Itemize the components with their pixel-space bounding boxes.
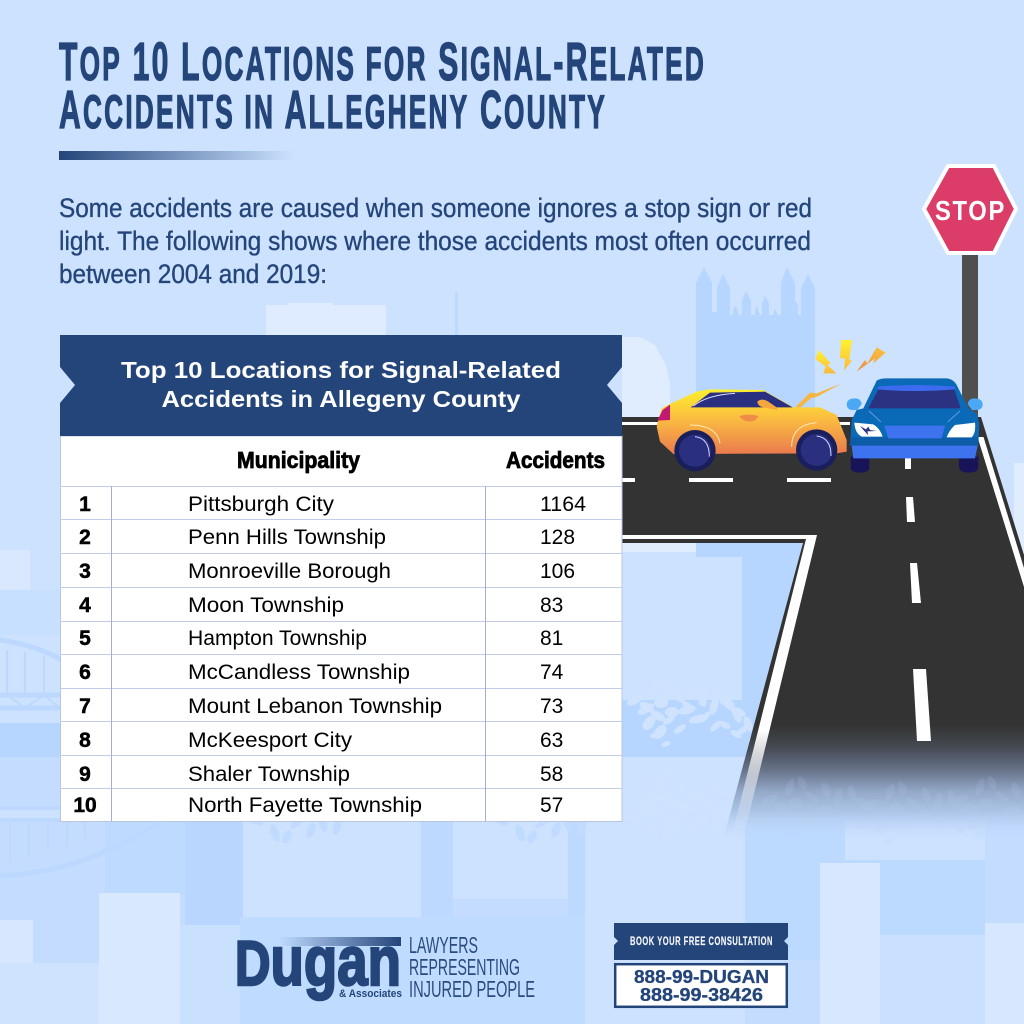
municipality names: North Fayette Township [188, 793, 422, 817]
road edge line: top [622, 422, 850, 425]
municipality names: Moon Township [188, 593, 344, 617]
logo tagline: INJURED PEOPLE [409, 976, 535, 1002]
background cathedral [696, 267, 815, 417]
intro paragraph: between 2004 and 2019: [59, 259, 327, 289]
municipality names: Hampton Township [188, 626, 367, 650]
road surface [622, 417, 1024, 840]
logo subtitle: & Associates [339, 988, 402, 1000]
municipality names: Mount Lebanon Township [188, 694, 442, 718]
table column headers: Accidents [506, 447, 605, 473]
road edge line: junction [622, 535, 817, 835]
accident counts: 106 [540, 560, 575, 583]
title [59, 32, 706, 140]
callout: free consultation [614, 923, 788, 1007]
callout banner [614, 923, 788, 960]
accident counts: 128 [540, 526, 575, 549]
title line 1: TOP 10 LOCATIONS FOR SIGNAL-RELATED [59, 32, 706, 92]
background trees [245, 675, 761, 845]
table grid [60, 486, 622, 788]
rank numbers: 1 [79, 493, 91, 516]
municipality names: Penn Hills Township [188, 525, 386, 549]
icon: blue car [847, 378, 983, 473]
accident counts: 74 [540, 661, 564, 684]
phone box [615, 964, 787, 1007]
accident counts: 63 [540, 729, 563, 752]
table banner heading [121, 357, 561, 412]
accident counts [540, 493, 586, 817]
accident counts: 73 [540, 695, 563, 718]
accident counts: 81 [540, 627, 563, 650]
rank numbers: 3 [79, 560, 91, 583]
road [622, 417, 1024, 844]
municipality names: McCandless Township [188, 660, 410, 684]
table banner [60, 335, 622, 436]
rank numbers: 4 [79, 594, 91, 617]
stop sign [924, 166, 1016, 420]
title underline [59, 151, 295, 160]
crash sparks [815, 340, 886, 373]
intro paragraph [59, 193, 812, 289]
road fade mottling [760, 775, 1024, 844]
logo: Dugan and Associates [235, 922, 535, 1002]
rank numbers: 10 [73, 794, 97, 817]
sign plate [924, 166, 1016, 253]
table banner heading: Top 10 Locations for Signal-Related [121, 357, 561, 383]
municipality names [188, 492, 442, 817]
table banner heading: Accidents in Allegeny County [162, 386, 521, 412]
logo tagline: LAWYERS [409, 932, 478, 958]
table body [60, 436, 622, 822]
phone numbers: 888-99-38426 [640, 985, 763, 1005]
title line 2: ACCIDENTS IN ALLEGHENY COUNTY [59, 80, 607, 140]
rank numbers: 5 [79, 627, 91, 650]
table column headers [237, 447, 605, 473]
logo gradient bar [279, 937, 401, 946]
table column headers: Municipality [237, 447, 360, 473]
municipality names: Shaler Township [188, 762, 350, 786]
vertical lane dashes [905, 458, 931, 741]
municipality names: Monroeville Borough [188, 559, 391, 583]
background bridge [0, 640, 160, 876]
intro paragraph: light. The following shows where those accidents most often occurred [59, 226, 811, 256]
icon: yellow car [657, 383, 847, 471]
rank numbers: 9 [79, 763, 91, 786]
rank numbers [73, 493, 97, 817]
horizontal lane dashes [622, 478, 831, 482]
logo tagline: REPRESENTING [409, 954, 520, 980]
rank numbers: 7 [79, 695, 91, 718]
logo wordmark: Dugan [235, 922, 401, 1000]
sign text: STOP [935, 195, 1006, 226]
callout banner text: BOOK YOUR FREE CONSULTATION [630, 936, 773, 948]
accident counts: 1164 [540, 493, 586, 516]
municipality names: Pittsburgh City [188, 492, 334, 516]
accident counts: 58 [540, 763, 563, 786]
intro paragraph: Some accidents are caused when someone ignores a stop sign or red [59, 193, 812, 223]
rank numbers: 8 [79, 729, 91, 752]
phone numbers [634, 967, 769, 1005]
municipality names: McKeesport City [188, 728, 352, 752]
panel: table [60, 335, 622, 822]
accident counts: 83 [540, 594, 563, 617]
accident counts: 57 [540, 794, 563, 817]
phone numbers: 888-99-DUGAN [634, 967, 769, 987]
sign post [962, 255, 978, 420]
logo tagline [409, 932, 535, 1002]
road edge line: right [978, 437, 1024, 587]
rank numbers: 6 [79, 661, 91, 684]
rank numbers: 2 [79, 526, 91, 549]
